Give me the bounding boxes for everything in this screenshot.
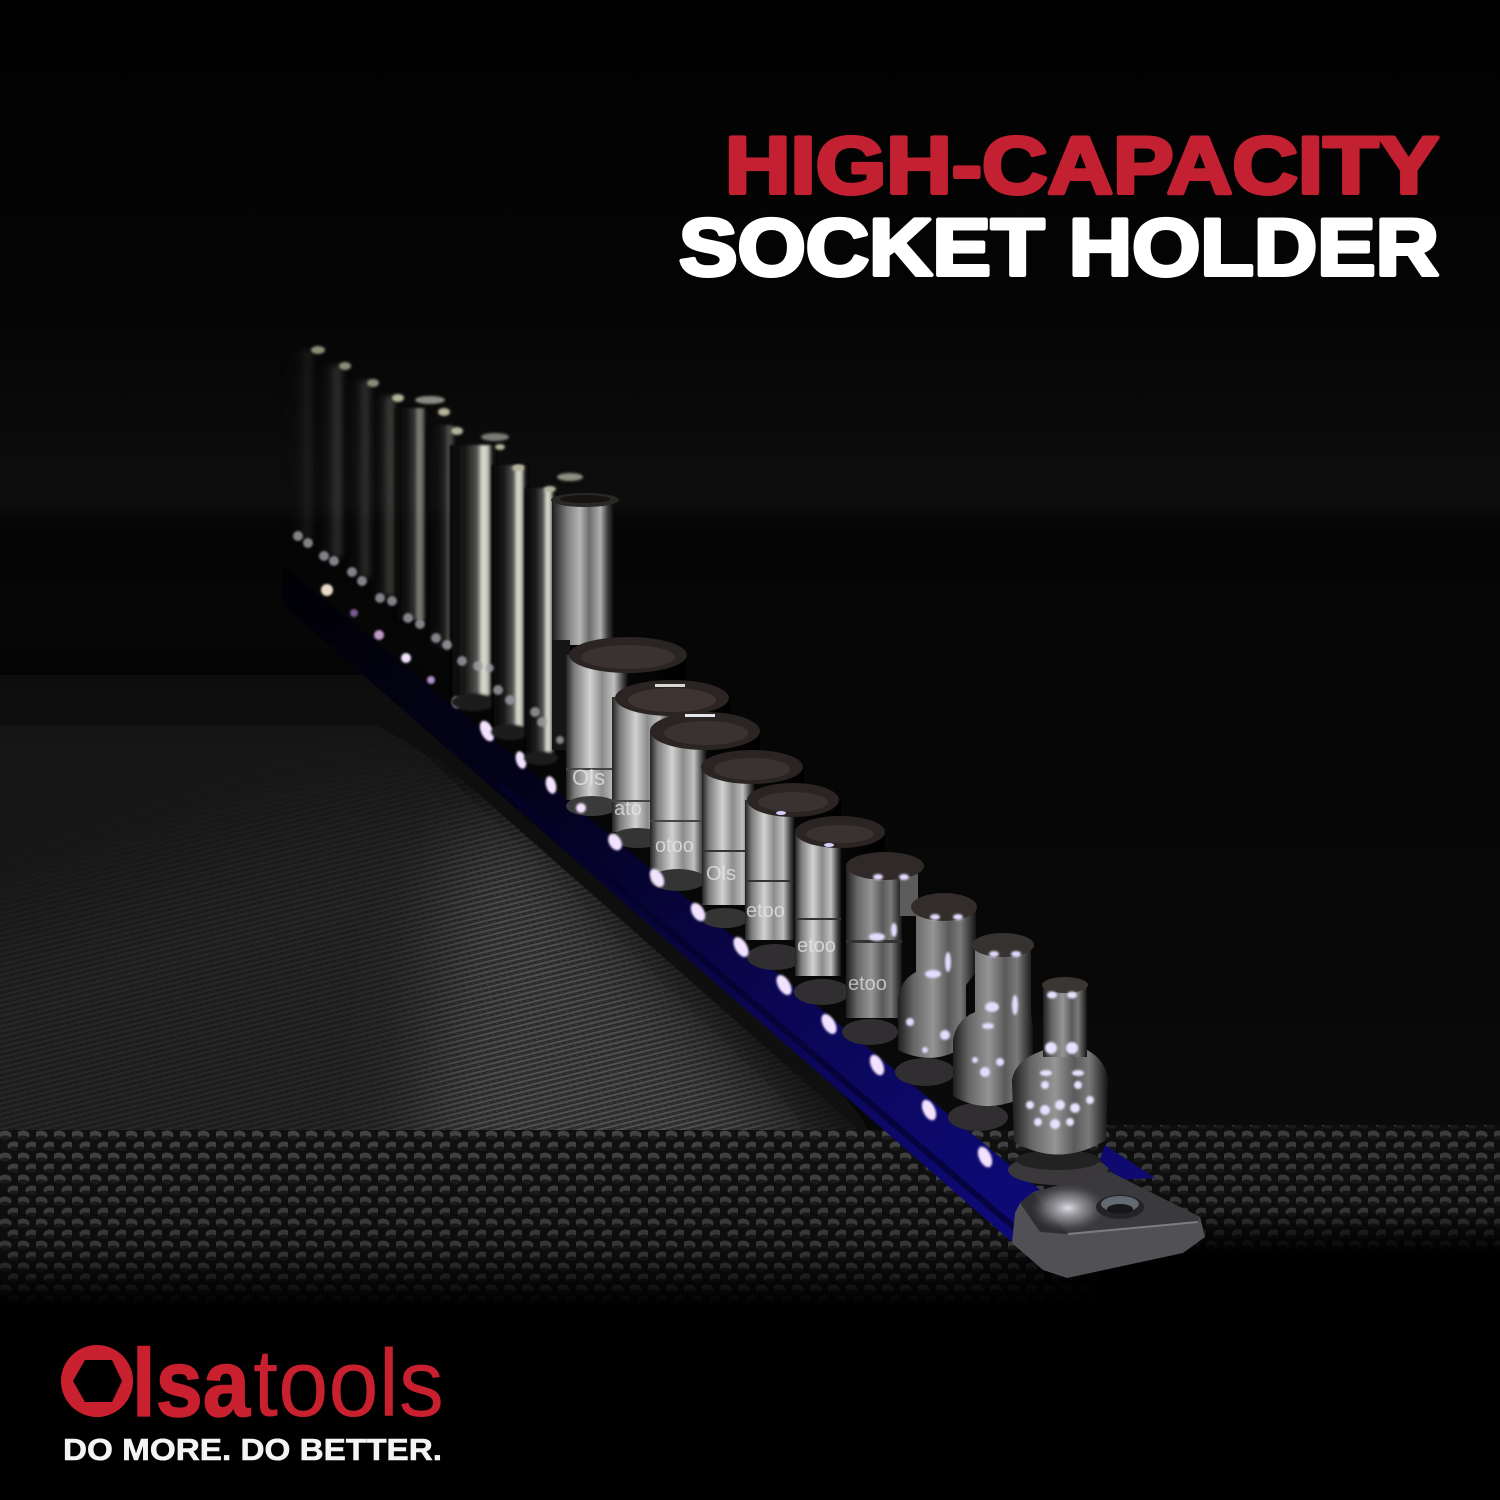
violet reflections xyxy=(1026,992,1094,1129)
lit woven fabric wedge xyxy=(0,782,850,1130)
deep socket 2 xyxy=(315,365,345,557)
front socket 7 xyxy=(842,852,924,1045)
deep socket 6 xyxy=(427,425,457,647)
deep socket 5 xyxy=(395,408,428,620)
front socket 6 xyxy=(794,816,885,1005)
engraved mark: etoo xyxy=(797,935,836,957)
title xyxy=(679,121,1439,293)
violet reflections xyxy=(906,914,963,1053)
title line 1: HIGH-CAPACITY xyxy=(725,121,1439,211)
rail front reflection dots xyxy=(576,803,995,1170)
violet reflections xyxy=(869,874,909,941)
deep socket 7 xyxy=(450,445,496,711)
engraved mark: etoo xyxy=(848,973,887,995)
blue socket rail xyxy=(283,565,1155,1242)
engraved mark: ato xyxy=(614,798,642,820)
front socket 2 xyxy=(612,680,730,848)
left fabric ground xyxy=(0,700,900,1180)
front socket 4 xyxy=(701,750,804,928)
front socket 9 xyxy=(948,933,1034,1131)
front socket 3 xyxy=(650,712,760,891)
deep socket 8 xyxy=(491,465,529,740)
deep socket 1 xyxy=(284,350,316,540)
front socket 1 xyxy=(566,637,687,816)
engraved mark: otoo xyxy=(655,835,694,857)
deep socket 9 xyxy=(524,488,558,765)
lower right mat fade xyxy=(950,1250,1110,1312)
logo word light part: tools xyxy=(253,1330,444,1437)
rail reflection dots xyxy=(321,584,558,795)
tagline: DO MORE. DO BETTER. xyxy=(63,1432,442,1467)
logo hex O mark xyxy=(61,1345,133,1417)
front socket 10 xyxy=(1008,977,1108,1185)
logo word bold part: lsa xyxy=(132,1330,251,1437)
bottom black band xyxy=(0,1254,1500,1500)
rear socket rim highlights xyxy=(311,346,583,492)
deep socket 4 xyxy=(371,396,397,596)
violet reflections xyxy=(972,951,1021,1077)
engraved mark: Ols xyxy=(572,765,605,790)
deep socket 3 xyxy=(345,380,373,578)
textured mat foreground right xyxy=(1100,1125,1500,1255)
engraved mark: Ols xyxy=(706,863,736,885)
rail end cap with mounting hole xyxy=(1012,1172,1205,1278)
textured mat foreground left xyxy=(0,1130,1130,1315)
rear socket base reflections xyxy=(293,531,564,744)
front socket 5 xyxy=(745,783,841,970)
front socket 8 xyxy=(895,893,977,1086)
title line 2: SOCKET HOLDER xyxy=(679,203,1439,293)
deep sockets row, rear xyxy=(284,346,619,765)
logo xyxy=(61,1330,444,1467)
engraved mark: etoo xyxy=(746,900,785,922)
deep socket 10 xyxy=(551,493,619,750)
